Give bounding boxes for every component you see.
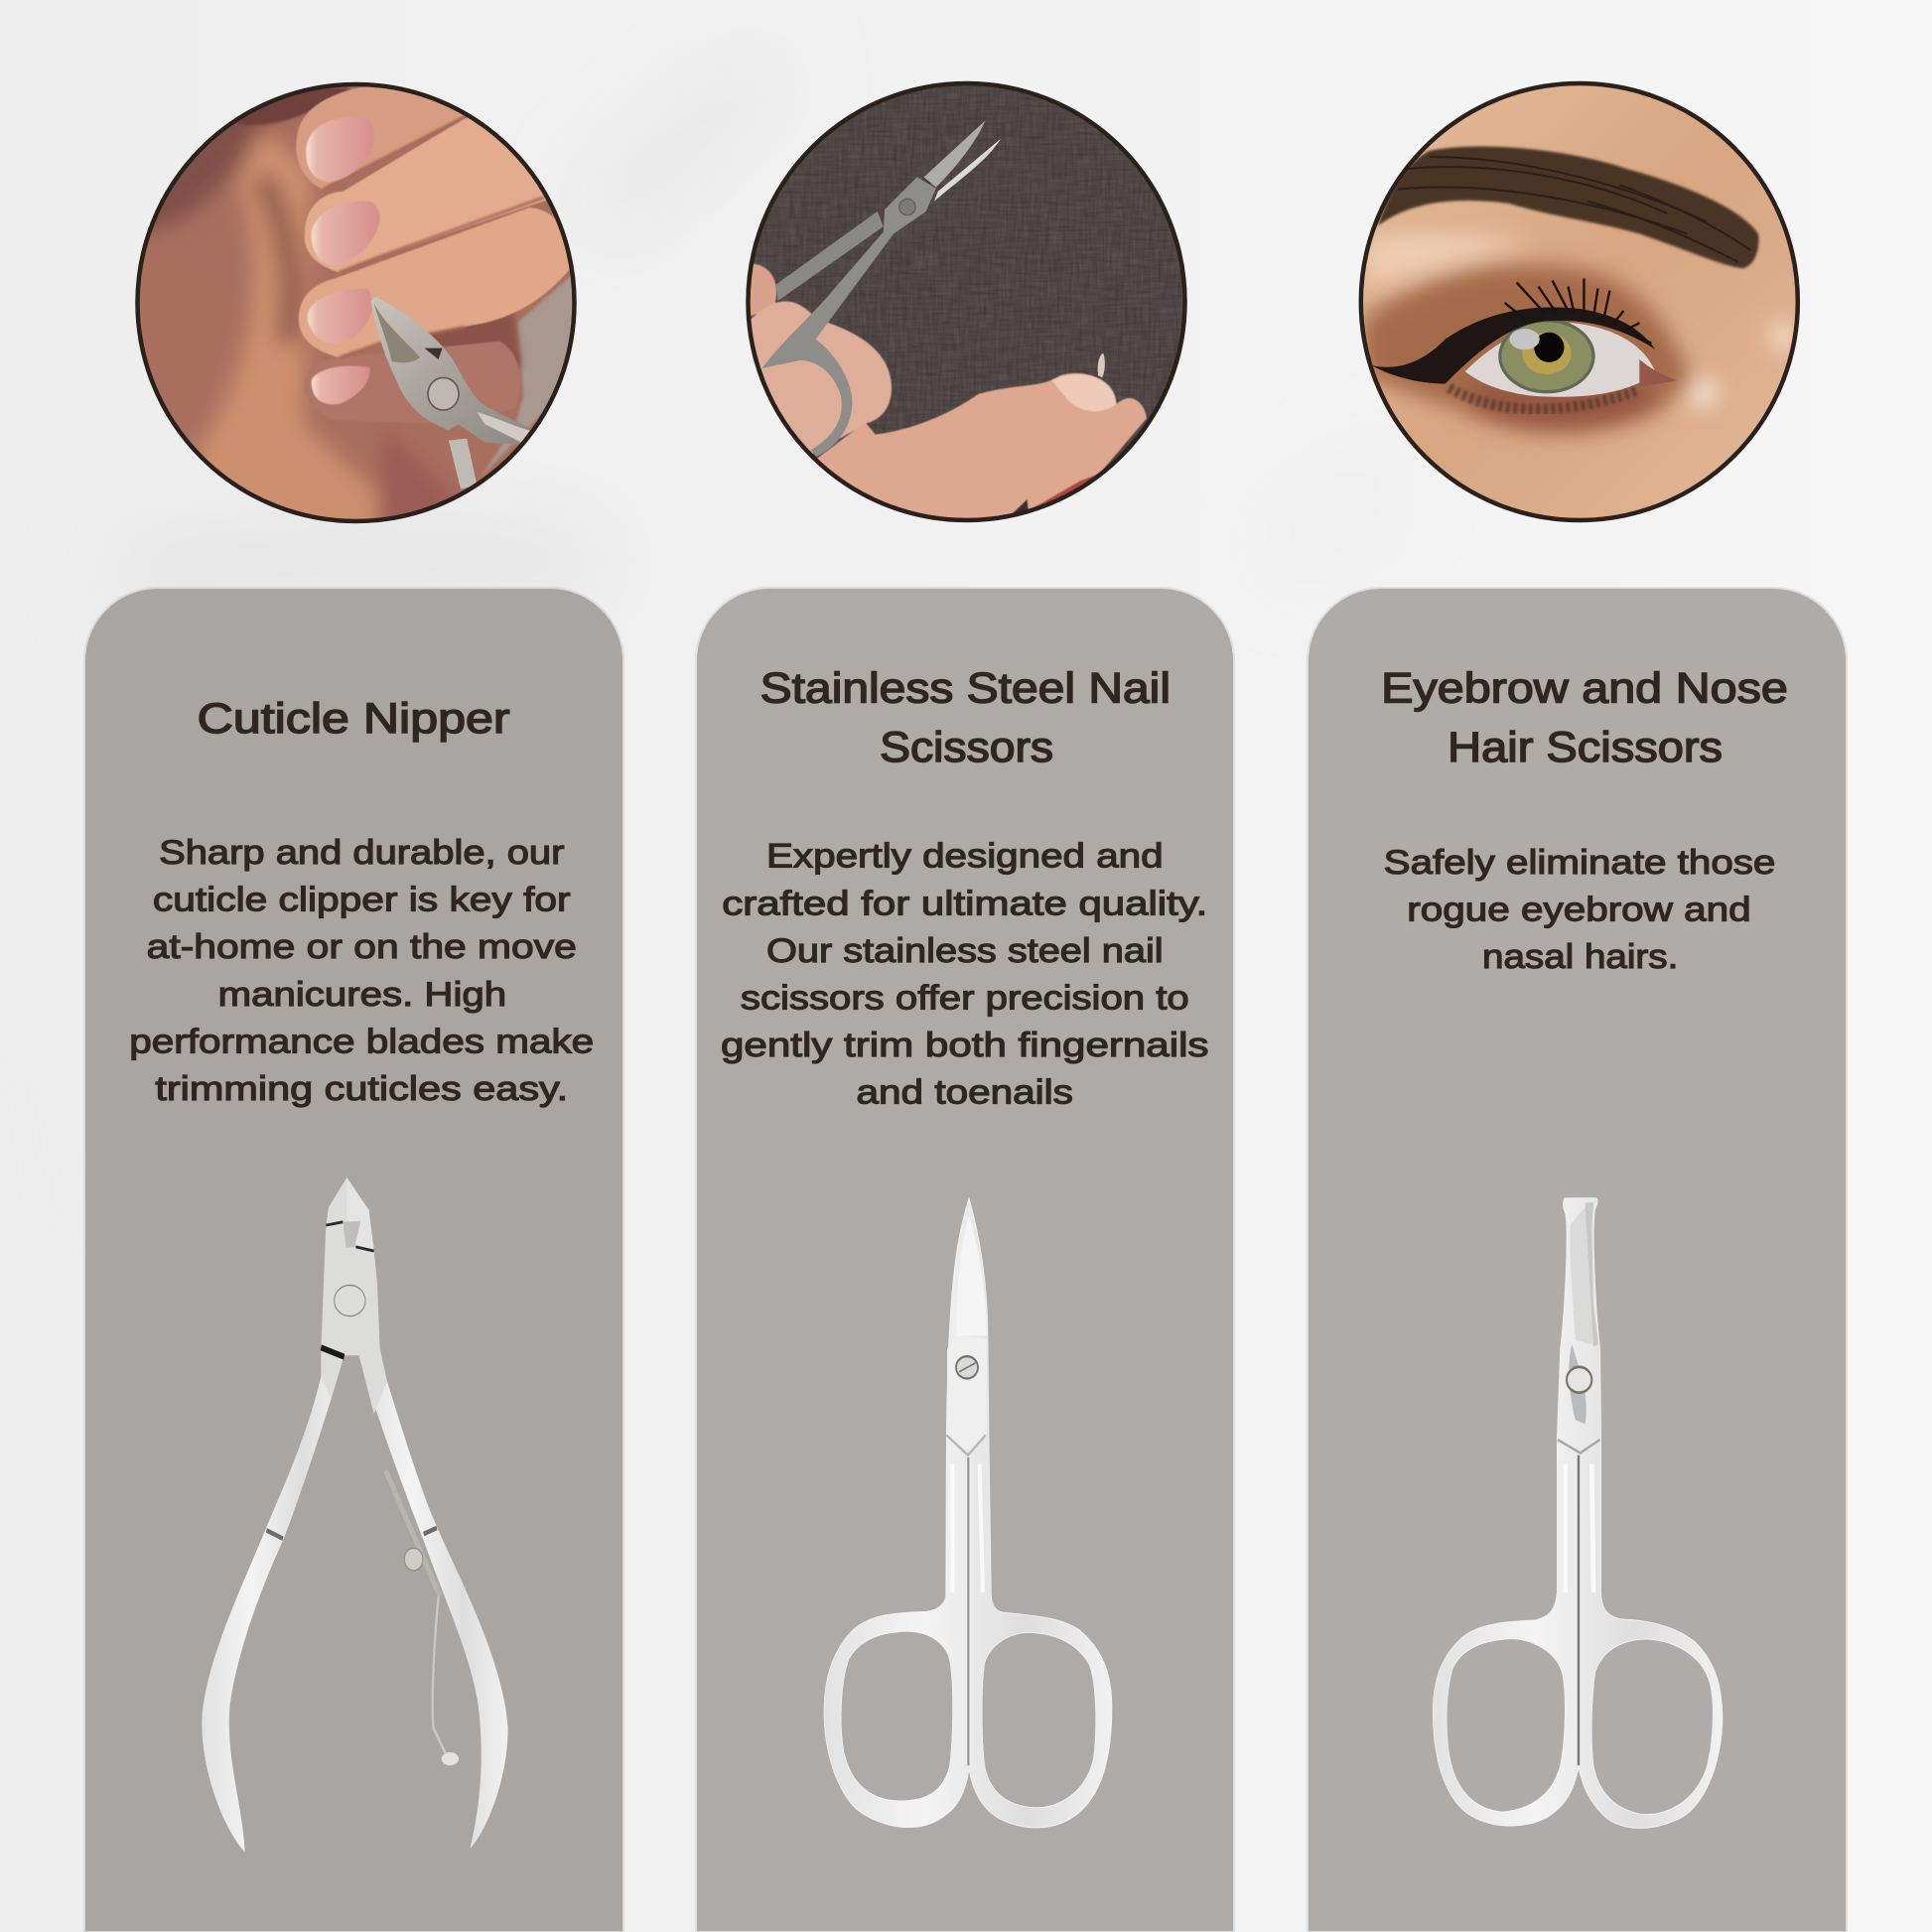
body text: cuticle nipper: at-home or on the move xyxy=(147,928,577,966)
heading: eyebrow and nose hair scissors xyxy=(1381,665,1788,771)
body text: eyebrow scissors: nasal hairs. xyxy=(1482,938,1678,976)
heading: eyebrow and nose hair scissors: Eyebrow and Nose xyxy=(1381,665,1788,713)
thumb shadow edge xyxy=(237,87,351,126)
heading: stainless steel nail scissors: Scissors xyxy=(880,724,1053,771)
fingers xyxy=(744,262,1147,538)
body text: nail scissors: Our stainless steel nail xyxy=(766,932,1164,970)
body text: cuticle nipper: performance blades make xyxy=(129,1023,594,1060)
body text: nail scissors: and toenails xyxy=(856,1074,1073,1112)
body text: nail scissors: gently trim both fingernails xyxy=(721,1027,1209,1064)
eyeliner and lashes xyxy=(1372,307,1655,384)
body text: cuticle nipper: manicures. High xyxy=(218,976,506,1014)
photo frame 3 xyxy=(1361,83,1798,520)
body text: eyebrow scissors: rogue eyebrow and xyxy=(1407,892,1751,929)
heading: stainless steel nail scissors: Stainless Steel Nail xyxy=(760,665,1171,713)
panel: eyebrow scissors card xyxy=(1308,588,1847,1932)
body text: cuticle nipper: trimming cuticles easy. xyxy=(155,1070,568,1108)
body text: eyebrow scissors xyxy=(1384,844,1775,976)
photo frame 1 xyxy=(137,84,574,521)
body text: nail scissors xyxy=(721,838,1209,1112)
nails xyxy=(306,117,374,182)
product: eyebrow and nose hair scissors xyxy=(1433,1198,1723,1828)
body text: cuticle nipper: cuticle clipper is key for xyxy=(153,882,571,919)
body text: nail scissors: crafted for ultimate quality. xyxy=(722,885,1207,922)
heading: stainless steel nail scissors xyxy=(760,665,1171,771)
photo: hand with cuticle nipper xyxy=(139,86,572,519)
heading: cuticle nipper: Cuticle Nipper xyxy=(198,695,510,743)
dark gap between fingers xyxy=(431,314,525,369)
eye white xyxy=(1465,323,1655,397)
product: stainless steel nail scissors xyxy=(824,1198,1112,1828)
body text: cuticle nipper: Sharp and durable, our xyxy=(159,834,564,872)
body text: eyebrow scissors: Safely eliminate those xyxy=(1384,844,1775,882)
photo: scissors and nail clipping on dark fabric xyxy=(751,85,1183,518)
iris xyxy=(1500,321,1593,392)
photo: eye and eyebrow xyxy=(1363,85,1796,518)
photo frame 2 xyxy=(749,83,1185,520)
body text: nail scissors: scissors offer precision to xyxy=(741,979,1189,1017)
product: cuticle nipper xyxy=(202,1177,508,1853)
fabric scissors xyxy=(761,120,1001,457)
heading: eyebrow and nose hair scissors: Hair Scissors xyxy=(1448,724,1723,771)
panel: cuticle nipper card xyxy=(84,588,623,1932)
body text: nail scissors: Expertly designed and xyxy=(766,838,1164,876)
panel: nail scissors card xyxy=(696,588,1234,1932)
spring xyxy=(385,1470,440,1596)
nipper in hand xyxy=(370,297,529,489)
body text: cuticle nipper xyxy=(129,834,594,1108)
fingers xyxy=(296,87,570,422)
grey backdrop xyxy=(483,275,572,475)
eyebrow xyxy=(1378,146,1758,268)
